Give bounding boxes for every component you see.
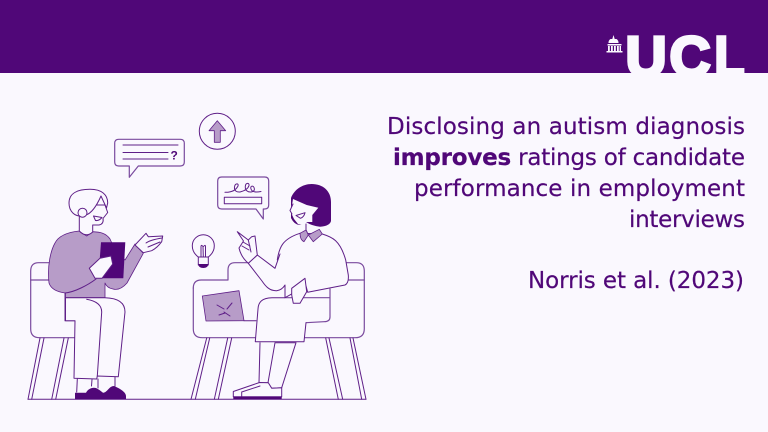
heading: performance in employment bbox=[414, 176, 745, 202]
man: torso and arm bbox=[48, 231, 143, 298]
icon: UCL portico bbox=[606, 35, 622, 52]
heading: Disclosing an autism diagnosis bbox=[387, 114, 745, 140]
woman: hair bbox=[291, 184, 331, 227]
woman: skirt bbox=[255, 298, 306, 342]
man: raised hand bbox=[135, 233, 163, 253]
wordmark: L bbox=[714, 26, 744, 89]
left chair bbox=[28, 263, 75, 399]
woman: face and neck bbox=[290, 199, 318, 235]
wordmark: U bbox=[626, 25, 667, 89]
heading: improves ratings of candidate bbox=[393, 145, 745, 171]
header band bbox=[0, 0, 768, 73]
question mark: ? bbox=[170, 148, 178, 162]
right chair bbox=[191, 263, 366, 399]
woman: collar bbox=[300, 229, 322, 242]
man: trousers bbox=[66, 298, 125, 379]
floor line bbox=[28, 398, 366, 400]
speech bubble: scribble bbox=[218, 177, 269, 219]
man: hand on tablet bbox=[89, 256, 113, 278]
speech bubble: question bbox=[115, 139, 184, 177]
man: shoes bbox=[75, 386, 126, 399]
citation: Norris et al. (2023) bbox=[528, 268, 744, 294]
man: socks bbox=[77, 377, 115, 392]
man: tablet bbox=[98, 242, 125, 278]
icon: light bulb bbox=[192, 235, 214, 268]
woman: legs bbox=[259, 343, 296, 388]
heading bbox=[387, 114, 745, 233]
man: head bbox=[69, 189, 108, 235]
woman: hand on knee bbox=[292, 278, 307, 303]
icon: up arrow in circle bbox=[199, 113, 235, 149]
heading: interviews bbox=[629, 207, 745, 233]
wordmark bbox=[627, 34, 744, 73]
wordmark: C bbox=[670, 25, 711, 89]
woman: mouth bbox=[296, 213, 305, 218]
woman: pointing hand bbox=[237, 232, 257, 263]
UCL logo bbox=[606, 34, 744, 73]
woman: shoe bbox=[233, 382, 282, 399]
laptop bbox=[202, 291, 256, 321]
illustration: interview scene bbox=[28, 113, 366, 399]
woman: top bbox=[248, 233, 348, 298]
